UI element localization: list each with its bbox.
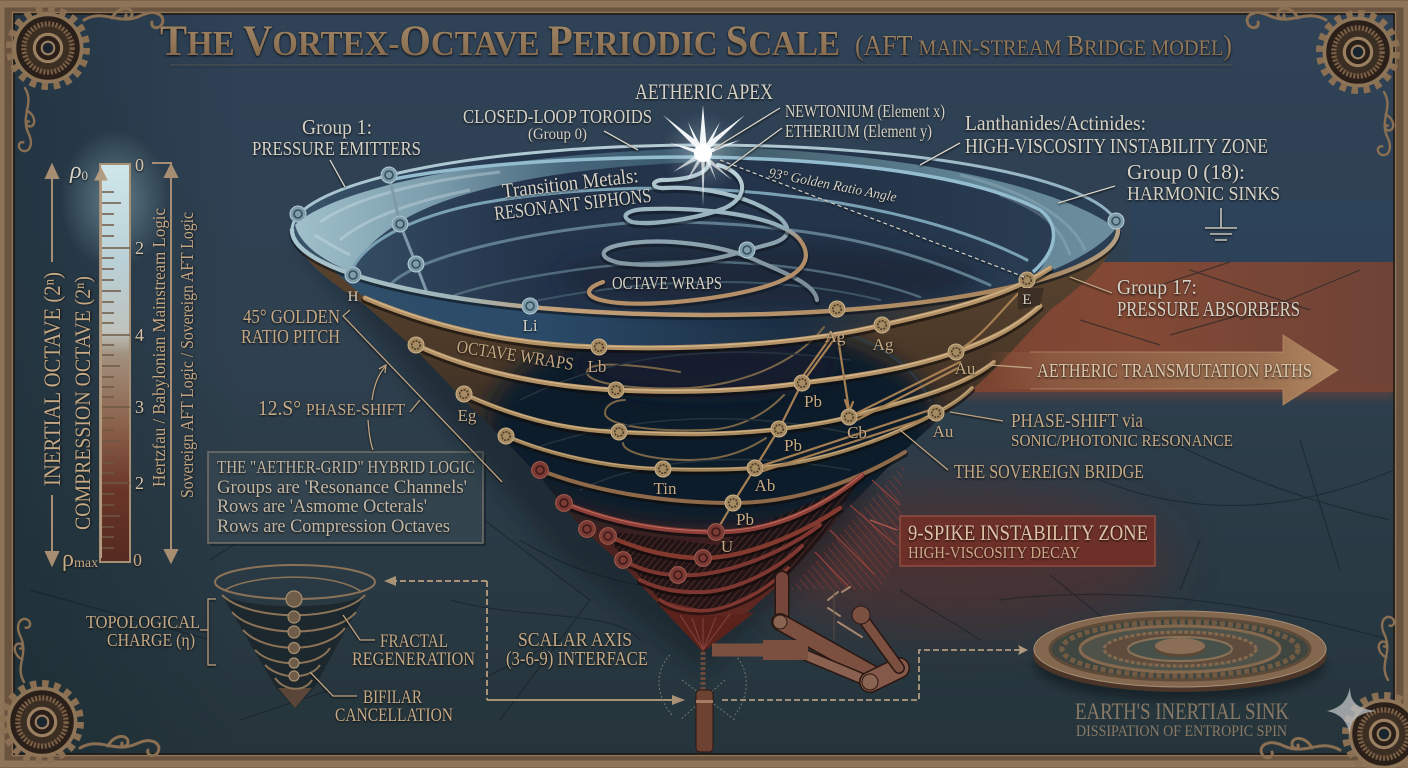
group 17 label	[1070, 275, 1300, 321]
transition metals label	[493, 163, 653, 225]
newtonium label	[715, 101, 945, 148]
bifilar cancellation label: BIFILAR	[363, 687, 422, 708]
earth's inertial sink disc	[1033, 611, 1327, 740]
group 17 label: PRESSURE ABSORBERS	[1117, 297, 1300, 321]
scale numbers	[133, 155, 144, 570]
mini cone body	[222, 595, 365, 708]
callout: 9-spike instability zone: HIGH-VISCOSITY DECAY	[908, 543, 1080, 562]
cone tip fan	[660, 606, 755, 652]
element labels: E	[1022, 292, 1032, 308]
lanthanides label: Lanthanides/Actinides:	[965, 111, 1146, 135]
pale right crescent	[700, 146, 1116, 278]
inertial octave label: INERTIAL OCTAVE (2ⁿ)	[40, 272, 65, 486]
arrow: scalar axis feedback	[384, 576, 685, 705]
transmutation connectors	[716, 285, 1027, 532]
hatched decay band	[600, 480, 860, 612]
etherium label: ETHERIUM (Element y)	[785, 121, 932, 142]
spiral: octave wraps	[589, 158, 817, 306]
fractal regeneration label	[343, 615, 475, 670]
bifilar cancellation label: CANCELLATION	[335, 705, 453, 726]
phase shift label: 12.S° PHASE-SHIFT	[258, 396, 406, 420]
mechanical arm	[712, 578, 899, 690]
arrow: aetheric transmutation paths	[985, 335, 1338, 405]
corner ornament: top right gear	[1247, 8, 1396, 155]
corner ornament: bottom right gear	[1261, 617, 1408, 768]
info box: aether-grid hybrid logic: THE "AETHER-GRID" HYBRID LOGIC	[217, 457, 475, 477]
red octave rings	[564, 474, 862, 613]
element labels: Li	[522, 316, 538, 335]
callout: the sovereign bridge	[900, 430, 1144, 483]
arrow: aetheric transmutation paths: AETHERIC TRANSMUTATION PATHS	[1037, 360, 1312, 382]
inner back arcs	[352, 175, 1027, 302]
transition metals label: Transition Metals:	[501, 163, 640, 203]
element labels: Ag	[825, 327, 846, 346]
corner ornament: top left gear	[10, 8, 163, 151]
scale bar	[100, 164, 130, 562]
rho zero label: ρ	[70, 158, 82, 184]
octave wraps label on band: OCTAVE WRAPS	[455, 336, 575, 374]
element labels: Eg	[458, 406, 477, 425]
element labels: U	[721, 537, 733, 556]
group 17 label: Group 17:	[1117, 275, 1197, 299]
element labels: Pb	[804, 392, 822, 411]
right double arrow	[152, 163, 177, 562]
bifilar cancellation label	[310, 672, 453, 726]
45 degree pitch label: RATIO PITCH	[241, 326, 340, 348]
title	[160, 18, 1232, 65]
info box: aether-grid hybrid logic	[208, 452, 486, 546]
title: (AFT MAIN-STREAM BRIDGE MODEL)	[855, 31, 1232, 62]
mini fractal cone	[215, 565, 375, 708]
45 degree pitch label	[241, 306, 502, 482]
closed loop toroids label: CLOSED-LOOP TOROIDS	[463, 106, 652, 128]
topological charge label	[86, 599, 216, 665]
group 1 label: Group 1:	[302, 115, 372, 139]
element labels: Ag	[873, 335, 894, 354]
element labels: Tin	[653, 479, 677, 498]
group 0 (18) label	[1058, 160, 1280, 205]
funnel opening	[292, 145, 1118, 315]
element labels	[348, 289, 1032, 556]
element nodes: gold	[408, 272, 1036, 512]
newtonium label: NEWTONIUM (Element x)	[785, 101, 945, 122]
scalar axis rod	[659, 652, 746, 752]
left density scale	[40, 130, 197, 572]
octave wraps label inside funnel: OCTAVE WRAPS	[612, 273, 722, 293]
callout: 9-spike instability zone	[870, 516, 1155, 566]
mini cone rings	[215, 565, 375, 689]
fractal regeneration label: FRACTAL	[380, 631, 448, 652]
title: THE VORTEX-OCTAVE PERIODIC SCALE	[160, 18, 840, 65]
callout: phase-shift via resonance: PHASE-SHIFT via	[1011, 410, 1143, 432]
scale numbers: 4	[135, 325, 144, 345]
scalar axis label	[506, 629, 648, 670]
closed loop toroids label	[463, 106, 652, 150]
sink label	[1075, 699, 1289, 740]
callout: phase-shift via resonance: SONIC/PHOTONIC RESONANCE	[1011, 431, 1233, 450]
fractal regeneration label: REGENERATION	[352, 649, 475, 670]
mini cone nodes	[286, 591, 302, 681]
element nodes: red	[531, 461, 725, 584]
corner ornament: bottom left gear	[4, 619, 159, 760]
group 1 label	[252, 115, 421, 187]
callouts: upper labels and leaders	[241, 79, 1300, 482]
element labels: Lb	[588, 357, 606, 376]
transition metals label: RESONANT SIPHONS	[493, 185, 653, 225]
compression octave label: COMPRESSION OCTAVE (2ⁿ)	[70, 276, 95, 530]
sink label: DISSIPATION OF ENTROPIC SPIN	[1076, 723, 1287, 740]
inner dark well	[487, 320, 937, 612]
scale numbers: 2	[135, 238, 144, 258]
phase shift label	[258, 365, 420, 450]
element labels: Cb	[847, 423, 867, 442]
topological charge label: TOPOLOGICAL	[86, 612, 200, 632]
back curls in well	[520, 327, 930, 490]
element plate: E	[1018, 288, 1044, 310]
rust band	[940, 262, 1394, 392]
back rim highlight	[292, 145, 1118, 230]
group 0 (18) label: HARMONIC SINKS	[1127, 183, 1280, 205]
golden ratio angle	[720, 160, 1027, 278]
blue band below rim	[296, 230, 1118, 348]
etherium label	[725, 121, 932, 170]
lanthanides label: HIGH-VISCOSITY INSTABILITY ZONE	[965, 134, 1268, 158]
45 degree pitch label: 45° GOLDEN	[243, 306, 340, 328]
gold octave rings	[365, 267, 1050, 505]
scale up arrow	[95, 168, 107, 558]
lanthanides label	[920, 111, 1268, 165]
scale numbers: 0	[135, 155, 144, 175]
vortex cone	[290, 145, 1124, 670]
topological charge label: CHARGE (η)	[107, 630, 195, 651]
group 0 (18) label: Group 0 (18):	[1127, 160, 1245, 184]
inertial octave arrows	[46, 165, 58, 565]
mainstream logic label: Hertzfau / Babylonian Mainstream Logic	[149, 208, 169, 487]
icon: ground symbol	[1205, 208, 1237, 240]
hatched instability area	[790, 462, 905, 590]
rho zero label: 0	[82, 168, 88, 183]
group 1 label: PRESSURE EMITTERS	[252, 138, 421, 160]
callout: the sovereign bridge: THE SOVEREIGN BRIDGE	[954, 461, 1144, 483]
scale numbers: 3	[135, 397, 144, 417]
golden ratio angle: 93° Golden Ratio Angle	[767, 166, 898, 206]
element labels: Pb	[736, 510, 754, 529]
cone shadow	[300, 245, 880, 670]
element labels: Ab	[755, 476, 775, 495]
pale left crescent	[295, 148, 700, 272]
closed loop toroids label: (Group 0)	[528, 126, 587, 143]
rho max label: ρ	[62, 546, 74, 572]
element labels: Au	[933, 422, 954, 441]
arrow: output to inertial sink	[722, 645, 1028, 700]
sovereign logic label: Sovereign AFT Logic / Sovereign AFT Logic	[177, 212, 197, 498]
info box: aether-grid hybrid logic: Rows are 'Asmome Octerals'	[217, 496, 427, 517]
element labels: H	[348, 289, 359, 305]
sink label: EARTH'S INERTIAL SINK	[1075, 699, 1289, 724]
scalar axis label: SCALAR AXIS	[518, 629, 632, 651]
scale numbers: 0	[133, 550, 142, 570]
aetheric apex star	[661, 105, 745, 207]
aetheric apex label: AETHERIC APEX	[635, 79, 773, 104]
scalar axis label: (3-6-9) INTERFACE	[506, 648, 648, 670]
icon: corner sparkle	[1327, 687, 1376, 735]
element nodes: blue	[290, 166, 1124, 314]
element labels: Au	[955, 359, 976, 378]
cone body	[292, 232, 1118, 652]
callout: phase-shift via resonance	[950, 410, 1233, 450]
rho max label: max	[74, 556, 98, 571]
scale numbers: 2	[135, 473, 144, 493]
info box: aether-grid hybrid logic: Rows are Compression Octaves	[217, 516, 450, 537]
info box: aether-grid hybrid logic: Groups are 'Resonance Channels'	[217, 477, 467, 498]
callout: 9-spike instability zone: 9-SPIKE INSTABILITY ZONE	[908, 520, 1148, 545]
element labels: Pb	[784, 436, 802, 455]
ring: front rim	[292, 230, 1118, 317]
